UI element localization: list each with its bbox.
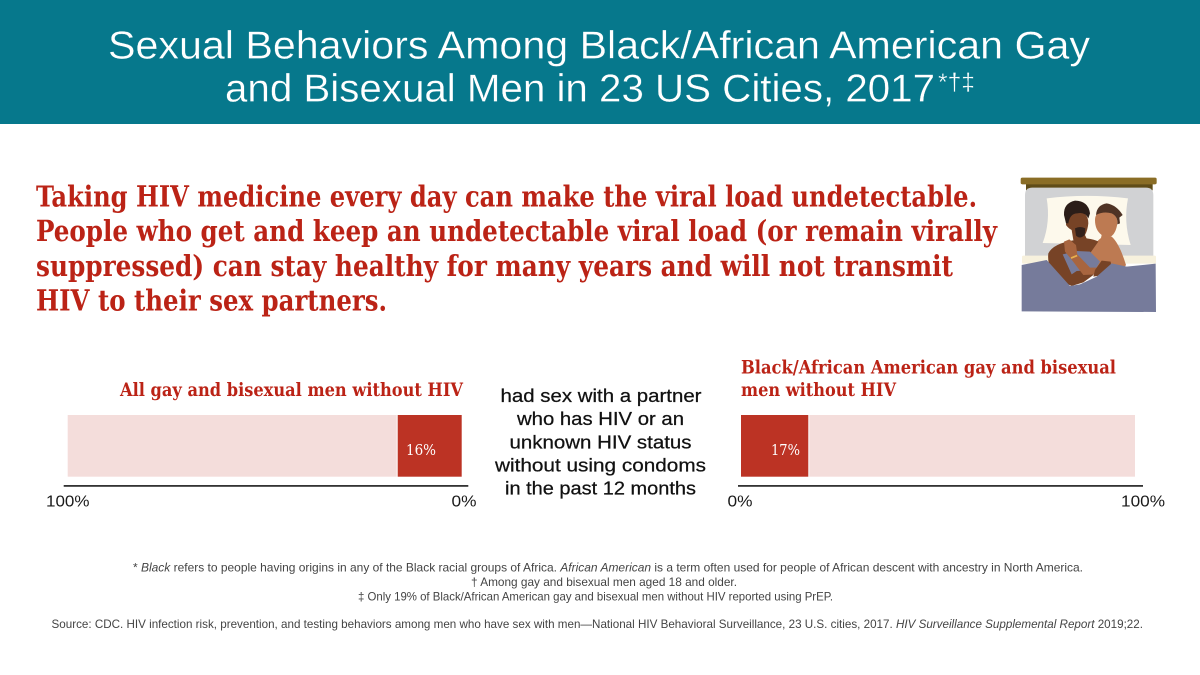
key message text <box>36 180 998 318</box>
icon: couple in bed <box>1021 178 1157 312</box>
key message text: People who get and keep an undetectable viral load (or remain virally <box>36 214 998 248</box>
key message text: suppressed) can stay healthy for many years and will not transmit <box>36 249 953 283</box>
bar value 16%: 16% <box>406 441 436 459</box>
center description text <box>494 385 706 498</box>
key message text: Taking HIV medicine every day can make the viral load undetectable. <box>36 180 977 214</box>
title banner <box>0 0 1200 124</box>
center description text: in the past 12 months <box>505 478 696 498</box>
axis <box>46 485 476 510</box>
center description text: without using condoms <box>494 454 706 476</box>
axis: 100% <box>46 494 90 510</box>
bar value 17% <box>741 415 808 477</box>
title: *†‡ <box>938 69 975 96</box>
footnotes: ‡ Only 19% of Black/African American gay and bisexual men without HIV reported using PrEP. <box>358 590 833 604</box>
axis: 0% <box>728 494 752 510</box>
title: and Bisexual Men in 23 US Cities, 2017 <box>225 68 935 110</box>
source citation: Source: CDC. HIV infection risk, prevention, and testing behaviors among men who have sex with men—National HIV Behavioral Surveillance, 23 U.S. cities, 2017. HIV Surveillance Supplemental Report 2019;22. <box>52 618 1143 631</box>
chart: Black/African American gay and bisexual men without HIV <box>728 358 1165 510</box>
bar value 17%: 17% <box>771 441 800 459</box>
axis <box>728 485 1165 510</box>
heading: Black/African American men: Black/African American gay and bisexual <box>741 358 1116 378</box>
center description text: who has HIV or an <box>516 408 684 429</box>
heading: Black/African American men <box>741 358 1116 401</box>
key message text: HIV to their sex partners. <box>36 284 387 318</box>
bar track <box>68 415 397 477</box>
heading: Black/African American men: men without HIV <box>741 380 897 401</box>
center description text: had sex with a partner <box>500 385 702 406</box>
footnotes: † Among gay and bisexual men aged 18 and older. <box>471 576 737 589</box>
center description text: unknown HIV status <box>510 432 692 452</box>
footnotes <box>133 562 1083 604</box>
heading: all men: All gay and bisexual men without HIV <box>119 380 464 401</box>
footnotes: * Black refers to people having origins in any of the Black racial groups of Africa. African American is a term often used for people of African descent with ancestry in North America. <box>133 562 1083 574</box>
bar value 16% <box>398 415 462 477</box>
bar track <box>809 415 1135 477</box>
axis: 100% <box>1121 494 1165 510</box>
chart: all gay and bisexual men without HIV <box>46 380 476 510</box>
title: Sexual Behaviors Among Black/African American Gay <box>108 24 1091 68</box>
axis: 0% <box>452 494 476 510</box>
title <box>108 24 1091 110</box>
